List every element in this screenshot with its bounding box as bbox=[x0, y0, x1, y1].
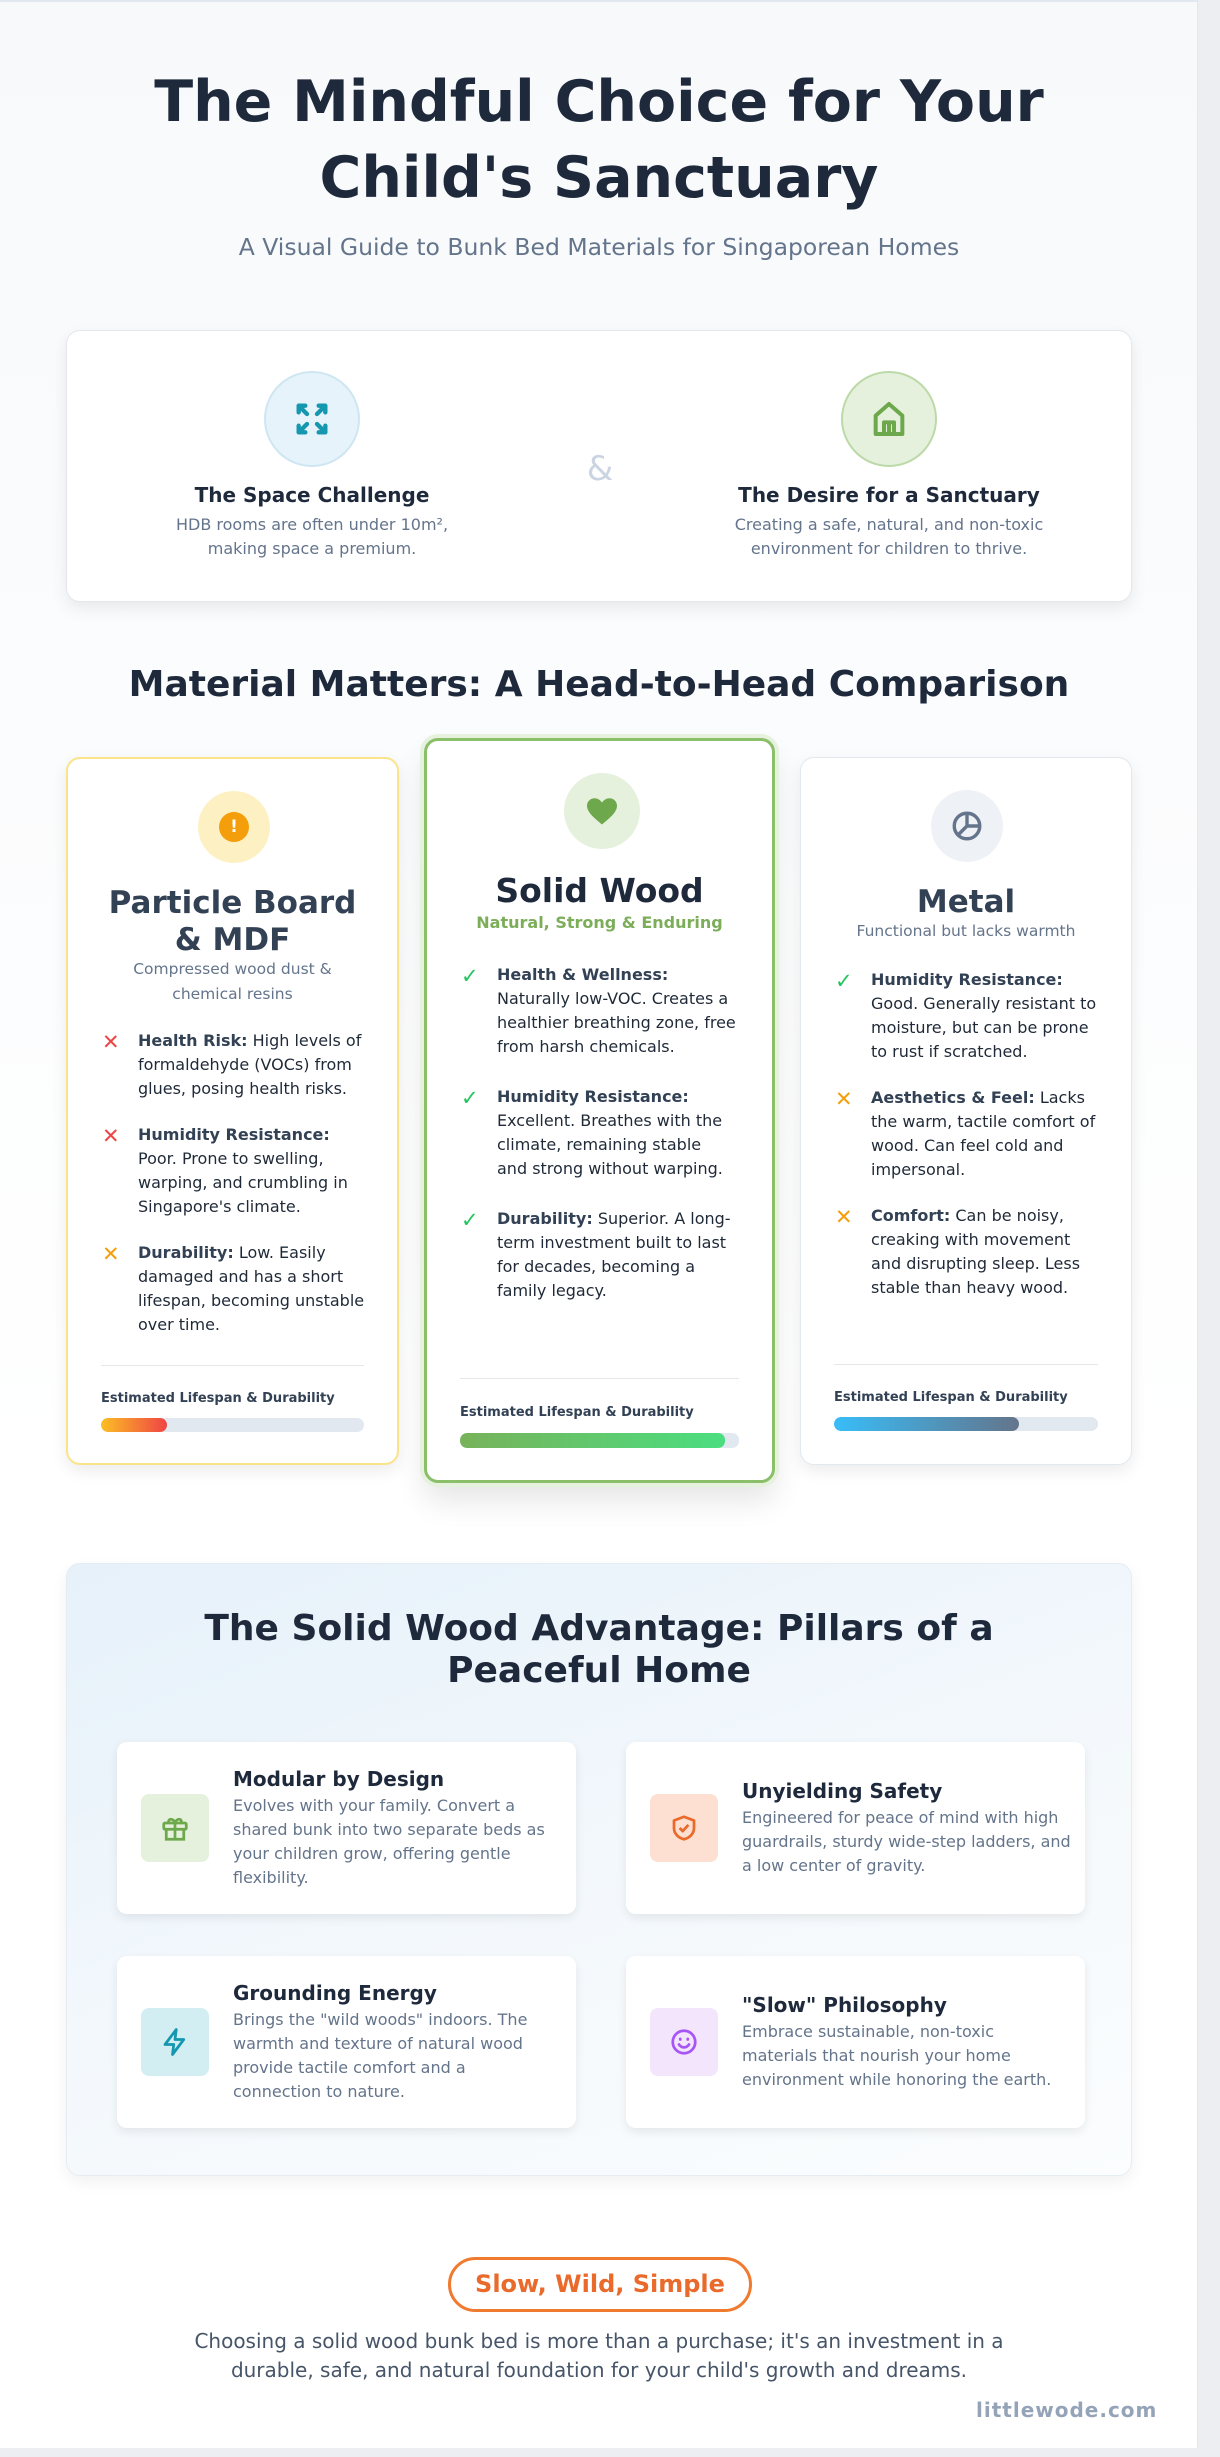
pillar: safety: Unyielding Safety bbox=[742, 1779, 942, 1803]
closing text: durable, safe, and natural foundation for your child's growth and dreams. bbox=[231, 2358, 967, 2382]
text: space challenge: HDB rooms are often under 10m², bbox=[176, 515, 448, 534]
icon: heart bbox=[564, 773, 640, 849]
list: Comfort: Can be noisy, creaking with movement and disrupting sleep. Less stable than heavy wood. bbox=[871, 1206, 1080, 1297]
list: Durability: Superior. A long-term investment built to last for decades, becoming a family legacy. bbox=[497, 1209, 731, 1300]
card: particle board: Compressed wood dust & bbox=[133, 960, 332, 978]
pillar: slow: Embrace sustainable, non-toxic materials that nourish your home environment while honoring the earth. bbox=[742, 2022, 1051, 2089]
pillar: grounding: Brings the "wild woods" indoors. The warmth and texture of natural wood provide tactile comfort and a connection to nature. bbox=[233, 2010, 527, 2101]
badge: Slow, Wild, Simple bbox=[475, 2270, 725, 2298]
list: Aesthetics & Feel: Lacks the warm, tactile comfort of wood. Can feel cold and impersonal. bbox=[871, 1088, 1095, 1179]
pillar: safety: Engineered for peace of mind with high guardrails, sturdy wide-step ladders, and a low center of gravity. bbox=[742, 1808, 1071, 1875]
badge bbox=[448, 2257, 752, 2312]
closing text: Choosing a solid wood bunk bed is more than a purchase; it's an investment in a bbox=[194, 2329, 1004, 2353]
heading: Solid Wood bbox=[495, 871, 704, 910]
text: space challenge: making space a premium. bbox=[208, 539, 416, 558]
text: sanctuary bbox=[735, 483, 1043, 558]
card: solid wood bbox=[424, 738, 775, 1483]
list: Humidity Resistance: Good. Generally resistant to moisture, but can be prone to rust if scratched. bbox=[871, 970, 1096, 1061]
pillar: modular: Modular by Design bbox=[233, 1767, 444, 1791]
card: metal bbox=[800, 757, 1132, 1465]
list: ✓ bbox=[461, 1086, 479, 1110]
list: ✕ bbox=[835, 1087, 853, 1111]
icon: smile bbox=[650, 2008, 718, 2076]
list: ✓ bbox=[461, 1208, 479, 1232]
list: Humidity Resistance: Excellent. Breathes with the climate, remaining stable and strong without warping. bbox=[497, 1087, 723, 1178]
icon: expand arrows bbox=[264, 371, 360, 467]
subtitle: A Visual Guide to Bunk Bed Materials for Singaporean Homes bbox=[239, 233, 959, 261]
list: Health Risk: High levels of formaldehyde (VOCs) from glues, posing health risks. bbox=[138, 1031, 361, 1098]
heading: Peaceful Home bbox=[447, 1650, 751, 1691]
text: sanctuary: environment for children to thrive. bbox=[751, 539, 1027, 558]
icon: gift bbox=[141, 1794, 209, 1862]
pillar: modular: Evolves with your family. Convert a shared bunk into two separate beds as your children grow, offering gentle flexibility. bbox=[233, 1796, 545, 1887]
heading bbox=[109, 885, 356, 958]
pillar: grounding: Grounding Energy bbox=[233, 1981, 437, 2005]
text: sanctuary: The Desire for a Sanctuary bbox=[738, 483, 1040, 507]
list bbox=[835, 969, 1096, 1297]
heading: The Solid Wood Advantage: Pillars of a bbox=[204, 1608, 994, 1649]
bar: Estimated Lifespan & Durability bbox=[834, 1390, 1068, 1405]
intro panel bbox=[66, 330, 1132, 602]
list: Health & Wellness: Naturally low-VOC. Creates a healthier breathing zone, free from harsh chemicals. bbox=[497, 965, 736, 1056]
list: Humidity Resistance: Poor. Prone to swelling, warping, and crumbling in Singapore's climate. bbox=[138, 1125, 348, 1216]
icon: warning: ! bbox=[230, 817, 238, 837]
ampersand: & bbox=[587, 449, 613, 489]
text: space challenge: The Space Challenge bbox=[195, 483, 429, 507]
list: ✕ bbox=[102, 1030, 120, 1054]
pillar: grounding bbox=[117, 1956, 576, 2128]
heading: Particle Board bbox=[109, 885, 356, 921]
list bbox=[102, 1030, 364, 1334]
pillar: modular bbox=[117, 1742, 576, 1914]
list: ✕ bbox=[835, 1205, 853, 1229]
heading: Metal bbox=[917, 884, 1015, 920]
pillar: slow bbox=[626, 1956, 1085, 2128]
list: ✓ bbox=[461, 964, 479, 988]
list bbox=[461, 964, 736, 1300]
closing text bbox=[194, 2329, 1004, 2382]
bar: Estimated Lifespan & Durability bbox=[101, 1391, 335, 1406]
icon: bolt bbox=[141, 2008, 209, 2076]
bar: Estimated Lifespan & Durability bbox=[460, 1405, 694, 1420]
icon: warning bbox=[198, 791, 270, 863]
heading bbox=[204, 1608, 994, 1691]
section heading: comparison: Material Matters: A Head-to-Head Comparison bbox=[129, 664, 1069, 705]
footer brand: littlewode.com bbox=[976, 2398, 1157, 2422]
icon: shield bbox=[650, 1794, 718, 1862]
text: space challenge bbox=[176, 483, 448, 558]
card: metal: Functional but lacks warmth bbox=[857, 922, 1075, 940]
list: ✓ bbox=[835, 969, 853, 993]
list: ✕ bbox=[102, 1242, 120, 1266]
list: Durability: Low. Easily damaged and has a short lifespan, becoming unstable over time. bbox=[138, 1243, 364, 1334]
text: sanctuary: Creating a safe, natural, and non-toxic bbox=[735, 515, 1043, 534]
card: particle board bbox=[66, 757, 399, 1465]
card: solid wood: Natural, Strong & Enduring bbox=[476, 913, 723, 932]
list: ✕ bbox=[102, 1124, 120, 1148]
icon: house bbox=[841, 371, 937, 467]
panel: solid wood advantage bbox=[66, 1563, 1132, 2176]
pillar: safety bbox=[626, 1742, 1085, 1914]
heading: & MDF bbox=[175, 922, 290, 958]
pillar: slow: "Slow" Philosophy bbox=[742, 1993, 947, 2017]
card: particle board: chemical resins bbox=[172, 985, 293, 1003]
icon: metal bbox=[931, 790, 1003, 862]
title: Child's Sanctuary bbox=[320, 145, 878, 211]
title bbox=[154, 69, 1044, 211]
title: The Mindful Choice for Your bbox=[154, 69, 1044, 135]
